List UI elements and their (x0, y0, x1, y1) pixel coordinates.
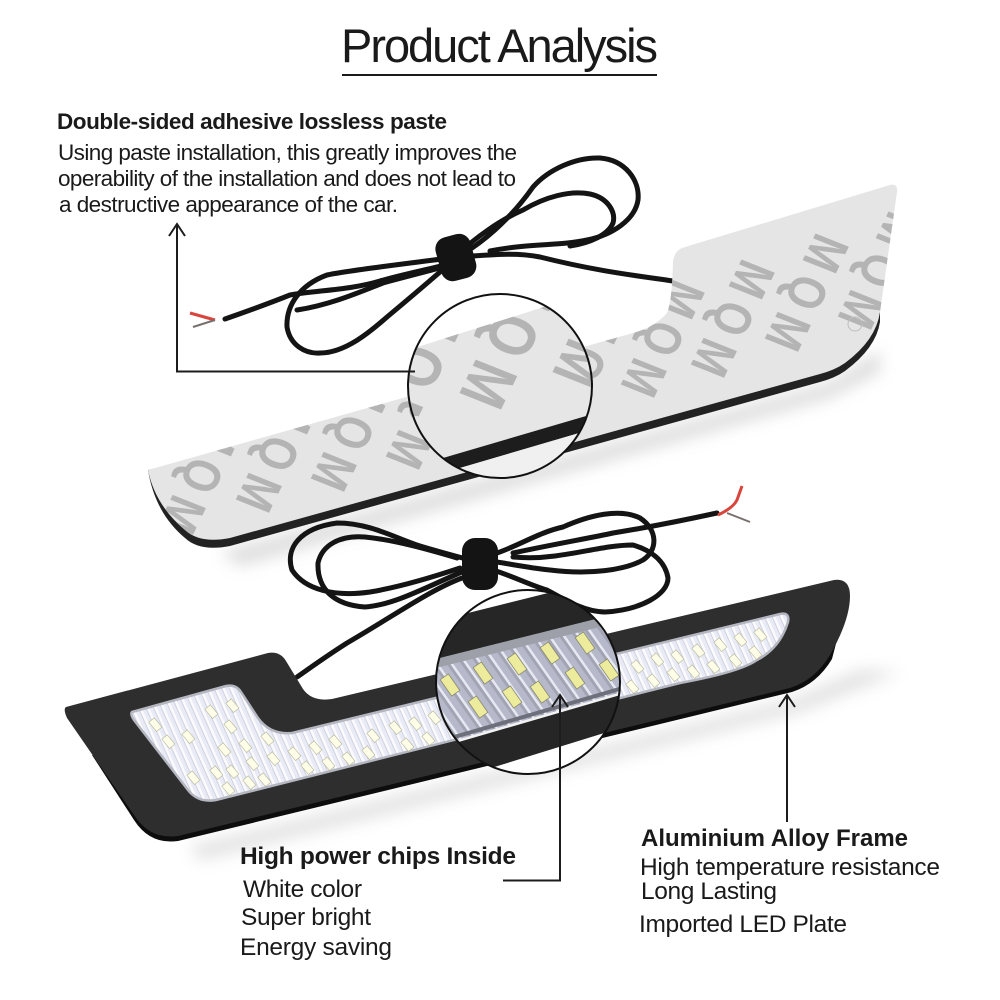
lamp black edge (148, 312, 880, 548)
product: front of lamp with LEDs (65, 486, 900, 860)
arrow: frame callout (779, 695, 795, 822)
text block: high power chips: Super bright (241, 904, 371, 931)
MQM print on sticker: MQM (219, 388, 331, 528)
magnifier: LED chip detail (435, 589, 621, 775)
title: Product Analysis (341, 19, 658, 72)
text block: high power chips (240, 843, 516, 961)
text block: high power chips: White color (243, 876, 362, 903)
text block: aluminium frame: High temperature resistance (640, 854, 940, 881)
LED board close-up (437, 620, 619, 740)
text block: adhesive paste: a destructive appearance of the car. (59, 192, 398, 217)
MQM print on sticker: MQM (821, 205, 933, 345)
lamp frame (65, 580, 850, 837)
arrow: adhesive callout (169, 224, 415, 372)
magnifier: adhesive detail: MQM (345, 284, 486, 460)
MQM print on sticker: MQM (369, 345, 481, 485)
lamp frame bottom edge (92, 620, 842, 842)
LED chips (149, 628, 767, 796)
MQM print on sticker: MQM (748, 227, 860, 367)
text block: aluminium frame: Imported LED Plate (639, 911, 847, 938)
text block: aluminium frame: Long Lasting (641, 878, 777, 905)
text block: aluminium frame: Aluminium Alloy Frame (641, 825, 908, 852)
MQM print on sticker: MQM (294, 367, 406, 507)
yellow chips (440, 632, 619, 718)
wire: bottom cable (290, 486, 750, 677)
product: back of lamp with adhesive (143, 158, 933, 566)
MQM print on sticker (166, 212, 894, 535)
frame close-up (440, 593, 618, 767)
text block: adhesive paste: Using paste installation, this greatly improves the (58, 140, 517, 165)
text block: adhesive paste (57, 109, 517, 217)
MQM print on sticker: MQM (674, 253, 786, 393)
magnifier: adhesive detail: MQM (439, 253, 580, 429)
text block: aluminium frame (639, 825, 940, 938)
text block: high power chips: Energy saving (240, 934, 392, 961)
wire: top cable (190, 158, 673, 353)
magnifier: adhesive detail: MQM (532, 232, 673, 408)
text block: high power chips: High power chips Inside (240, 843, 516, 870)
magnifier: adhesive detail (407, 293, 593, 479)
arrow: chips callout (503, 695, 568, 880)
text block: adhesive paste: operability of the installation and does not lead to (58, 166, 516, 191)
MQM print on sticker: MQM (526, 298, 638, 438)
text block: adhesive paste: Double-sided adhesive lossless paste (57, 109, 447, 134)
MQM print on sticker: MQM (604, 273, 716, 413)
MQM print on sticker: MQM (143, 410, 255, 550)
adhesive sticker (148, 185, 897, 540)
LED window (131, 614, 788, 801)
